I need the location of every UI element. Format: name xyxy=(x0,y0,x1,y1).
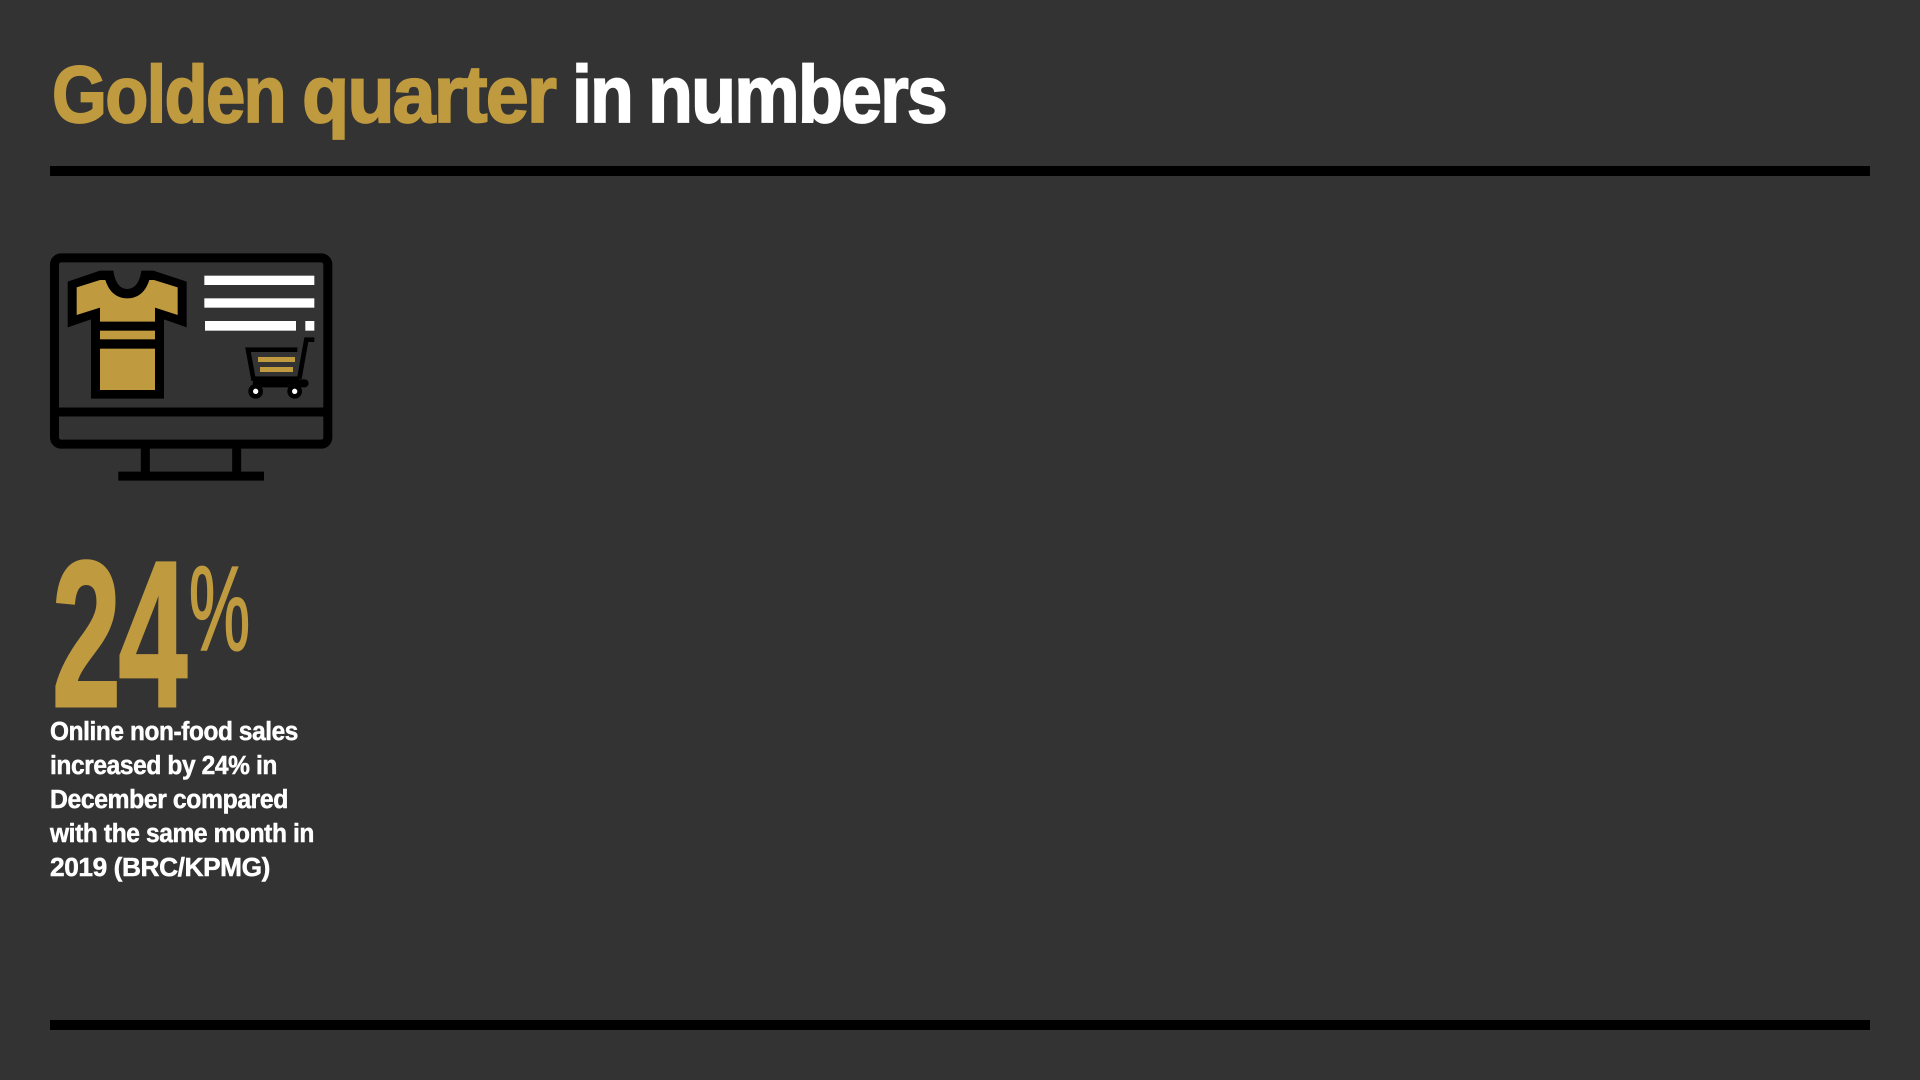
title: quarter xyxy=(302,50,556,140)
icon: t-shirt xyxy=(68,271,187,399)
icon: online shopping monitor xyxy=(54,258,328,476)
top rule xyxy=(50,166,1870,176)
title: in xyxy=(572,50,632,140)
big number: 24%: 24 xyxy=(52,519,187,751)
description text: Online non-food sales xyxy=(50,718,298,746)
description text xyxy=(49,718,314,882)
description text: December compared xyxy=(50,786,288,814)
bottom rule xyxy=(50,1020,1870,1030)
description text: with the same month in xyxy=(49,820,314,848)
icon: product text lines xyxy=(204,276,314,331)
monitor frame xyxy=(54,258,328,476)
title: Golden xyxy=(52,50,285,140)
description text: 2019 (BRC/KPMG) xyxy=(50,854,270,882)
title: numbers xyxy=(648,50,946,140)
description text: increased by 24% in xyxy=(50,752,277,780)
title xyxy=(52,50,946,140)
big number: 24%: % xyxy=(189,542,250,676)
icon: shopping cart xyxy=(248,340,314,399)
